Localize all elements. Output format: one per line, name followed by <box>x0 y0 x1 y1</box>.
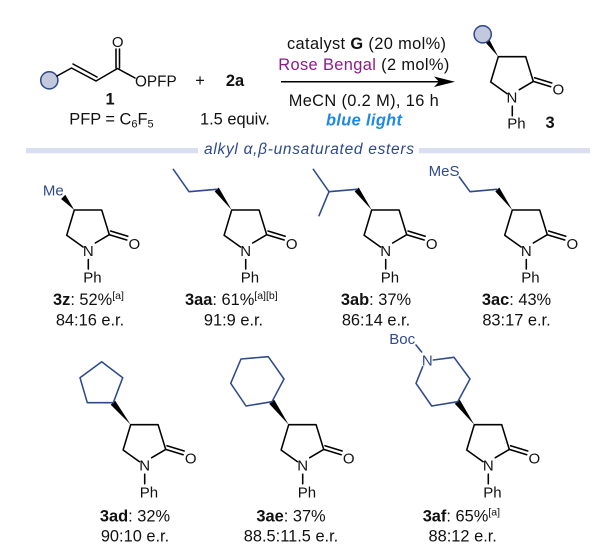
reagent equivalents: 1.5 equiv. <box>200 110 270 128</box>
structure 3aa: O <box>286 236 298 253</box>
structure 3ad <box>80 362 197 501</box>
compound 3ad <box>80 362 197 546</box>
compound 3ae: 88.5:11.5 e.r. <box>244 528 338 546</box>
substrate 1 structure <box>41 34 177 91</box>
structure 3ae: O <box>343 451 355 468</box>
structure 3ab <box>313 169 438 287</box>
structure 3af: Boc <box>389 331 416 348</box>
catalyst condition: catalyst G (20 mol%) <box>287 35 446 53</box>
section divider heading <box>26 141 590 158</box>
product 3 structure <box>474 26 564 132</box>
reaction scheme header <box>41 26 564 132</box>
reagent 2a: 2a <box>226 72 245 90</box>
compound 3z: 84:16 e.r. <box>56 312 124 330</box>
product label 3: 3 <box>545 114 555 132</box>
compound 3aa: 91:9 e.r. <box>204 312 263 330</box>
structure 3z: Me <box>43 182 64 200</box>
photocatalyst condition: Rose Bengal (2 mol%) <box>278 56 449 74</box>
structure 3af <box>389 331 540 501</box>
structure 3ab: O <box>426 236 438 253</box>
caption 3z: [a] <box>112 290 124 302</box>
compound 3ab <box>313 169 438 330</box>
structure 3z: Ph <box>83 270 102 287</box>
structure 3z: O <box>128 236 140 253</box>
compound 3af <box>389 331 540 546</box>
structure 3z <box>43 182 140 287</box>
compound label 1: 1 <box>105 90 115 108</box>
structure 3af: N <box>483 458 494 475</box>
structure 3aa: Ph <box>241 270 259 287</box>
structure 3ad: N <box>139 458 150 475</box>
caption 3ad: 3ad: 32% <box>100 508 170 526</box>
compound 3z <box>43 182 140 330</box>
compound 3ab: 86:14 e.r. <box>342 312 410 330</box>
caption 3aa: [a][b] <box>254 290 278 302</box>
structure 3ae: N <box>297 458 308 475</box>
caption 3ae: 3ae: 37% <box>256 508 326 526</box>
compound 3aa <box>173 169 298 330</box>
structure 3ae <box>231 357 355 501</box>
structure 3aa <box>173 169 298 287</box>
caption 3af: 3af: 65% <box>423 508 488 526</box>
structure 3af: N <box>422 353 433 370</box>
structure 3af: Ph <box>483 484 502 501</box>
PFP definition: F <box>138 110 148 128</box>
structure 3ae: Ph <box>298 484 316 501</box>
product 3 structure: O <box>552 82 564 99</box>
structure 3ad: Ph <box>140 484 158 501</box>
compound 3ac: 83:17 e.r. <box>482 312 551 330</box>
compound 3ac <box>429 163 578 330</box>
structure 3af: O <box>528 451 540 468</box>
PFP definition: 6 <box>131 118 138 130</box>
caption 3ab: 3ab: 37% <box>341 291 411 309</box>
structure 3ad: O <box>185 451 197 468</box>
caption 3af: [a] <box>488 507 500 519</box>
compound 3af: 88:12 e.r. <box>429 528 497 546</box>
structure 3z: N <box>83 243 94 260</box>
PFP definition: PFP = C <box>69 110 131 128</box>
compound 3ad: 90:10 e.r. <box>101 528 169 546</box>
section divider heading: alkyl α,β-unsaturated esters <box>204 141 414 158</box>
structure 3ac: O <box>566 236 578 253</box>
caption 3aa: 3aa: 61% <box>185 291 254 309</box>
caption 3z: 3z: 52% <box>53 291 112 309</box>
blue light: blue light <box>326 112 404 130</box>
structure 3ab: Ph <box>381 270 399 287</box>
structure 3ac: N <box>521 243 532 260</box>
structure 3ab: N <box>380 243 391 260</box>
substrate 1 structure: OPFP <box>135 74 177 91</box>
PFP definition: 5 <box>148 118 154 130</box>
reaction arrow <box>281 76 455 87</box>
structure 3ac <box>429 163 578 287</box>
substrate 1 structure: O <box>112 34 124 51</box>
compound 3ae <box>231 357 355 546</box>
solvent and time: MeCN (0.2 M), 16 h <box>289 92 439 110</box>
product 3 structure: N <box>506 90 517 107</box>
structure 3aa: N <box>240 243 251 260</box>
caption 3ac: 3ac: 43% <box>482 291 551 309</box>
structure 3ac: MeS <box>429 163 459 180</box>
product 3 structure: Ph <box>507 115 526 132</box>
structure 3ac: Ph <box>521 270 540 287</box>
plus sign: + <box>195 72 205 90</box>
